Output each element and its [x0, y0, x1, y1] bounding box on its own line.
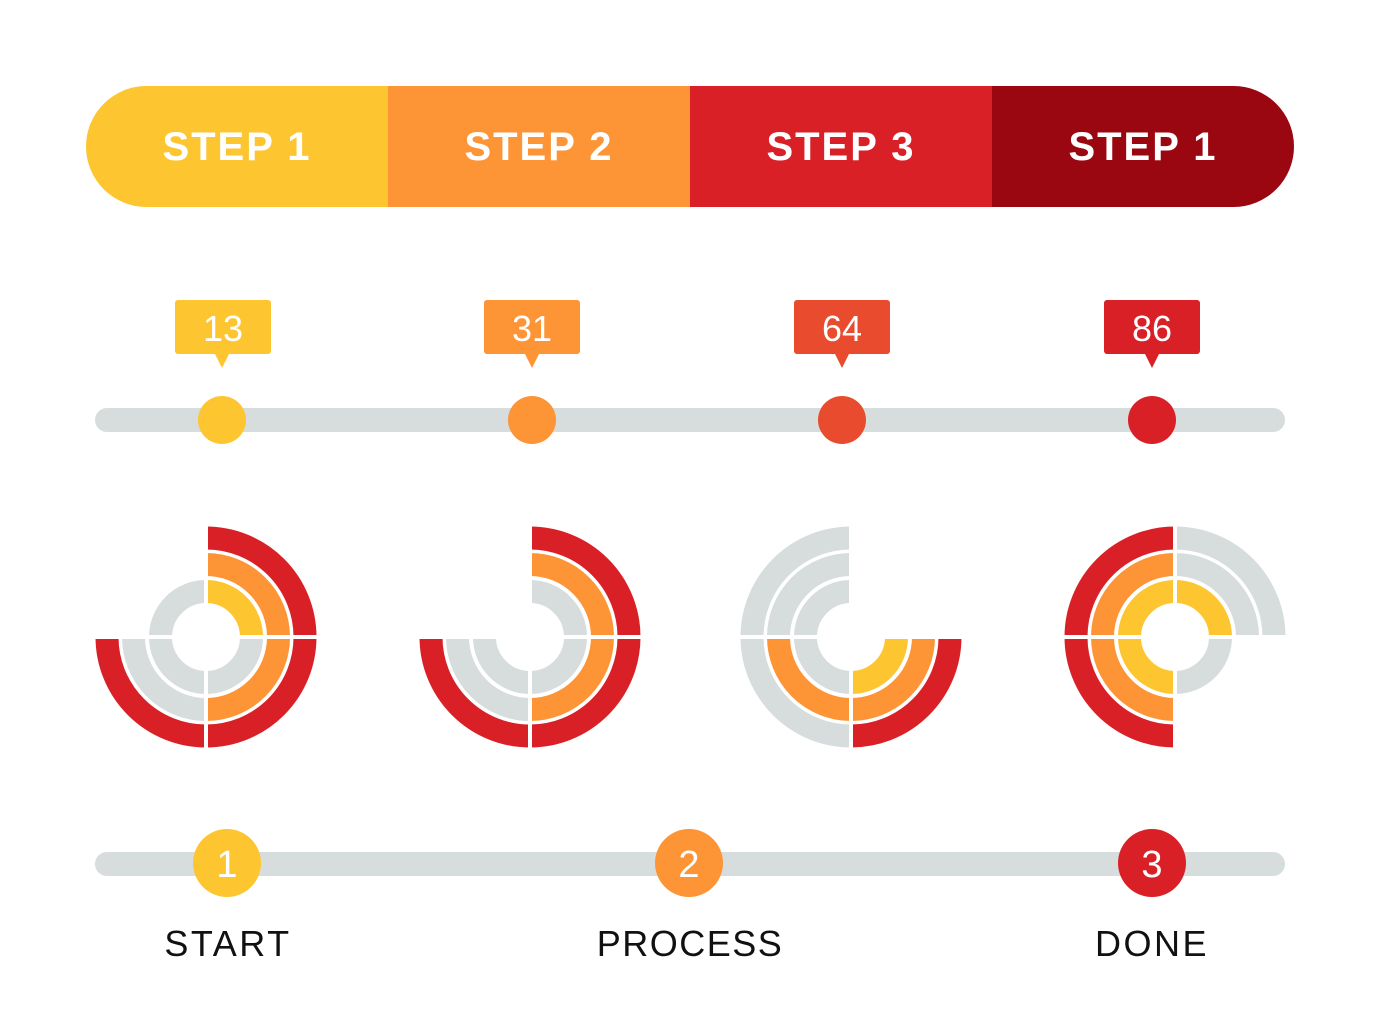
- node 2 process: [597, 829, 783, 964]
- step 4 label: STEP 1: [1068, 125, 1218, 169]
- radial chart 3: [736, 522, 966, 752]
- marker 64: [794, 300, 890, 444]
- value slider: [95, 300, 1285, 444]
- marker 86: 86: [1132, 308, 1172, 349]
- node 2 process: PROCESS: [597, 923, 783, 964]
- radial chart 1: [91, 522, 321, 752]
- node 1 start: 1: [216, 844, 238, 886]
- marker 86: [1104, 300, 1200, 444]
- marker 31: 31: [512, 308, 552, 349]
- step bar: [86, 86, 1294, 207]
- radial chart 2: [415, 522, 645, 752]
- node 1 start: START: [164, 923, 292, 964]
- radial chart 4: [1060, 522, 1290, 752]
- node 1 start: [164, 829, 292, 964]
- marker 13: [175, 300, 271, 444]
- step 2 label: STEP 2: [464, 125, 614, 169]
- step 1 label: STEP 1: [162, 125, 312, 169]
- node 3 done: DONE: [1095, 923, 1209, 964]
- progress track: [95, 829, 1285, 964]
- node 3 done: 3: [1141, 844, 1163, 886]
- marker 31: [484, 300, 580, 444]
- node 2 process: 2: [678, 844, 700, 886]
- marker 13: 13: [203, 308, 243, 349]
- node 3 done: [1095, 829, 1209, 964]
- step 3 label: STEP 3: [766, 125, 916, 169]
- marker 64: 64: [822, 308, 862, 349]
